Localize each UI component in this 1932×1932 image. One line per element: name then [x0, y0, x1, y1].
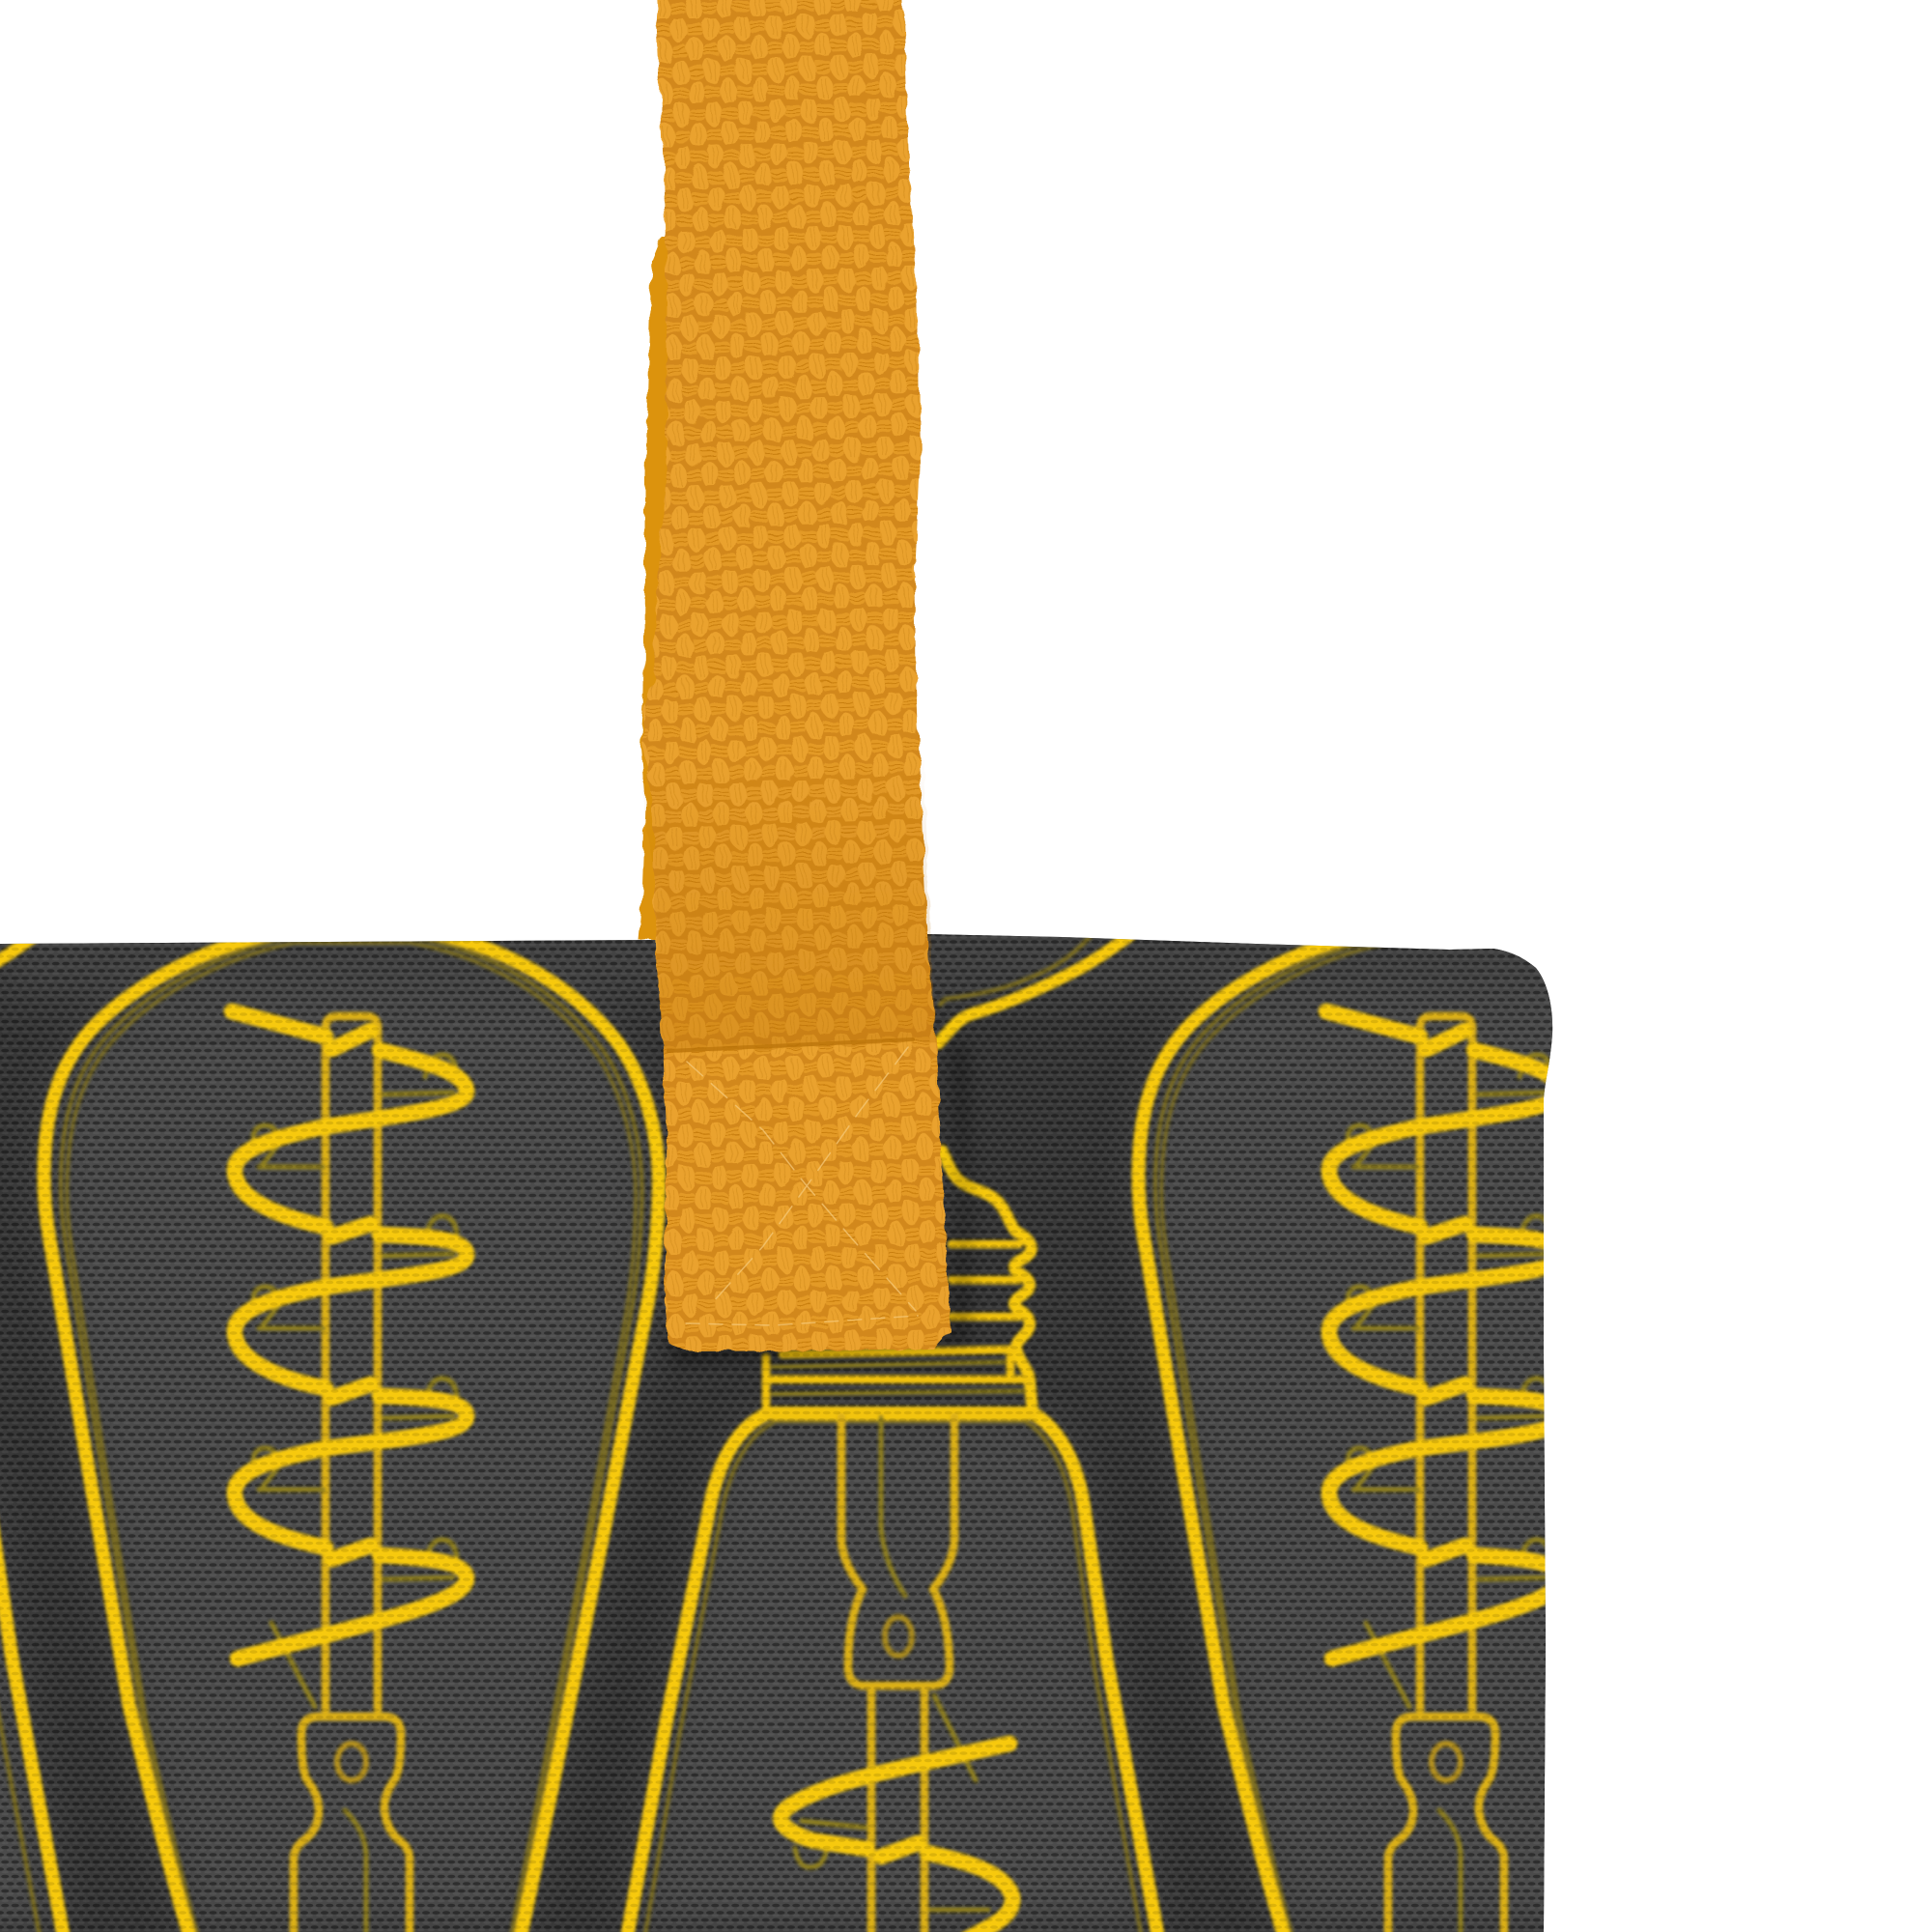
bulb: neighbour edge, lower left: [0, 935, 63, 1932]
strap: [642, 0, 951, 1351]
stitched tab: [668, 1039, 918, 1325]
filament loop: [795, 1848, 826, 1867]
filament mount: [841, 1417, 954, 1686]
body outline: [644, 1421, 1142, 1932]
bulb: left: [43, 929, 659, 1932]
bulb body shading: [0, 934, 1553, 1932]
screw cap: [942, 1151, 1033, 1413]
woven highlight over print: [0, 927, 1565, 1932]
strap webbing: [642, 0, 951, 1351]
strap shading toward stitched fold: [642, 753, 939, 1053]
canvas texture: [0, 927, 1565, 1932]
crease across the top hem: [0, 1036, 309, 1042]
bulb: centre: [628, 935, 1157, 1932]
bottom stitching: [686, 1316, 918, 1325]
shadow beneath strap tab: [667, 1043, 969, 1364]
yellow bulb pattern: [0, 937, 1549, 1932]
strap back layer: [638, 237, 671, 942]
fold line: [668, 1039, 913, 1051]
bulb: right: [1129, 945, 1549, 1932]
upper bulb curve: [940, 937, 1090, 1005]
canvas base: [0, 927, 1565, 1932]
cross stitching: [687, 1047, 916, 1311]
coil fragment: [781, 1744, 1012, 1932]
tote bag body: [0, 934, 1553, 1932]
